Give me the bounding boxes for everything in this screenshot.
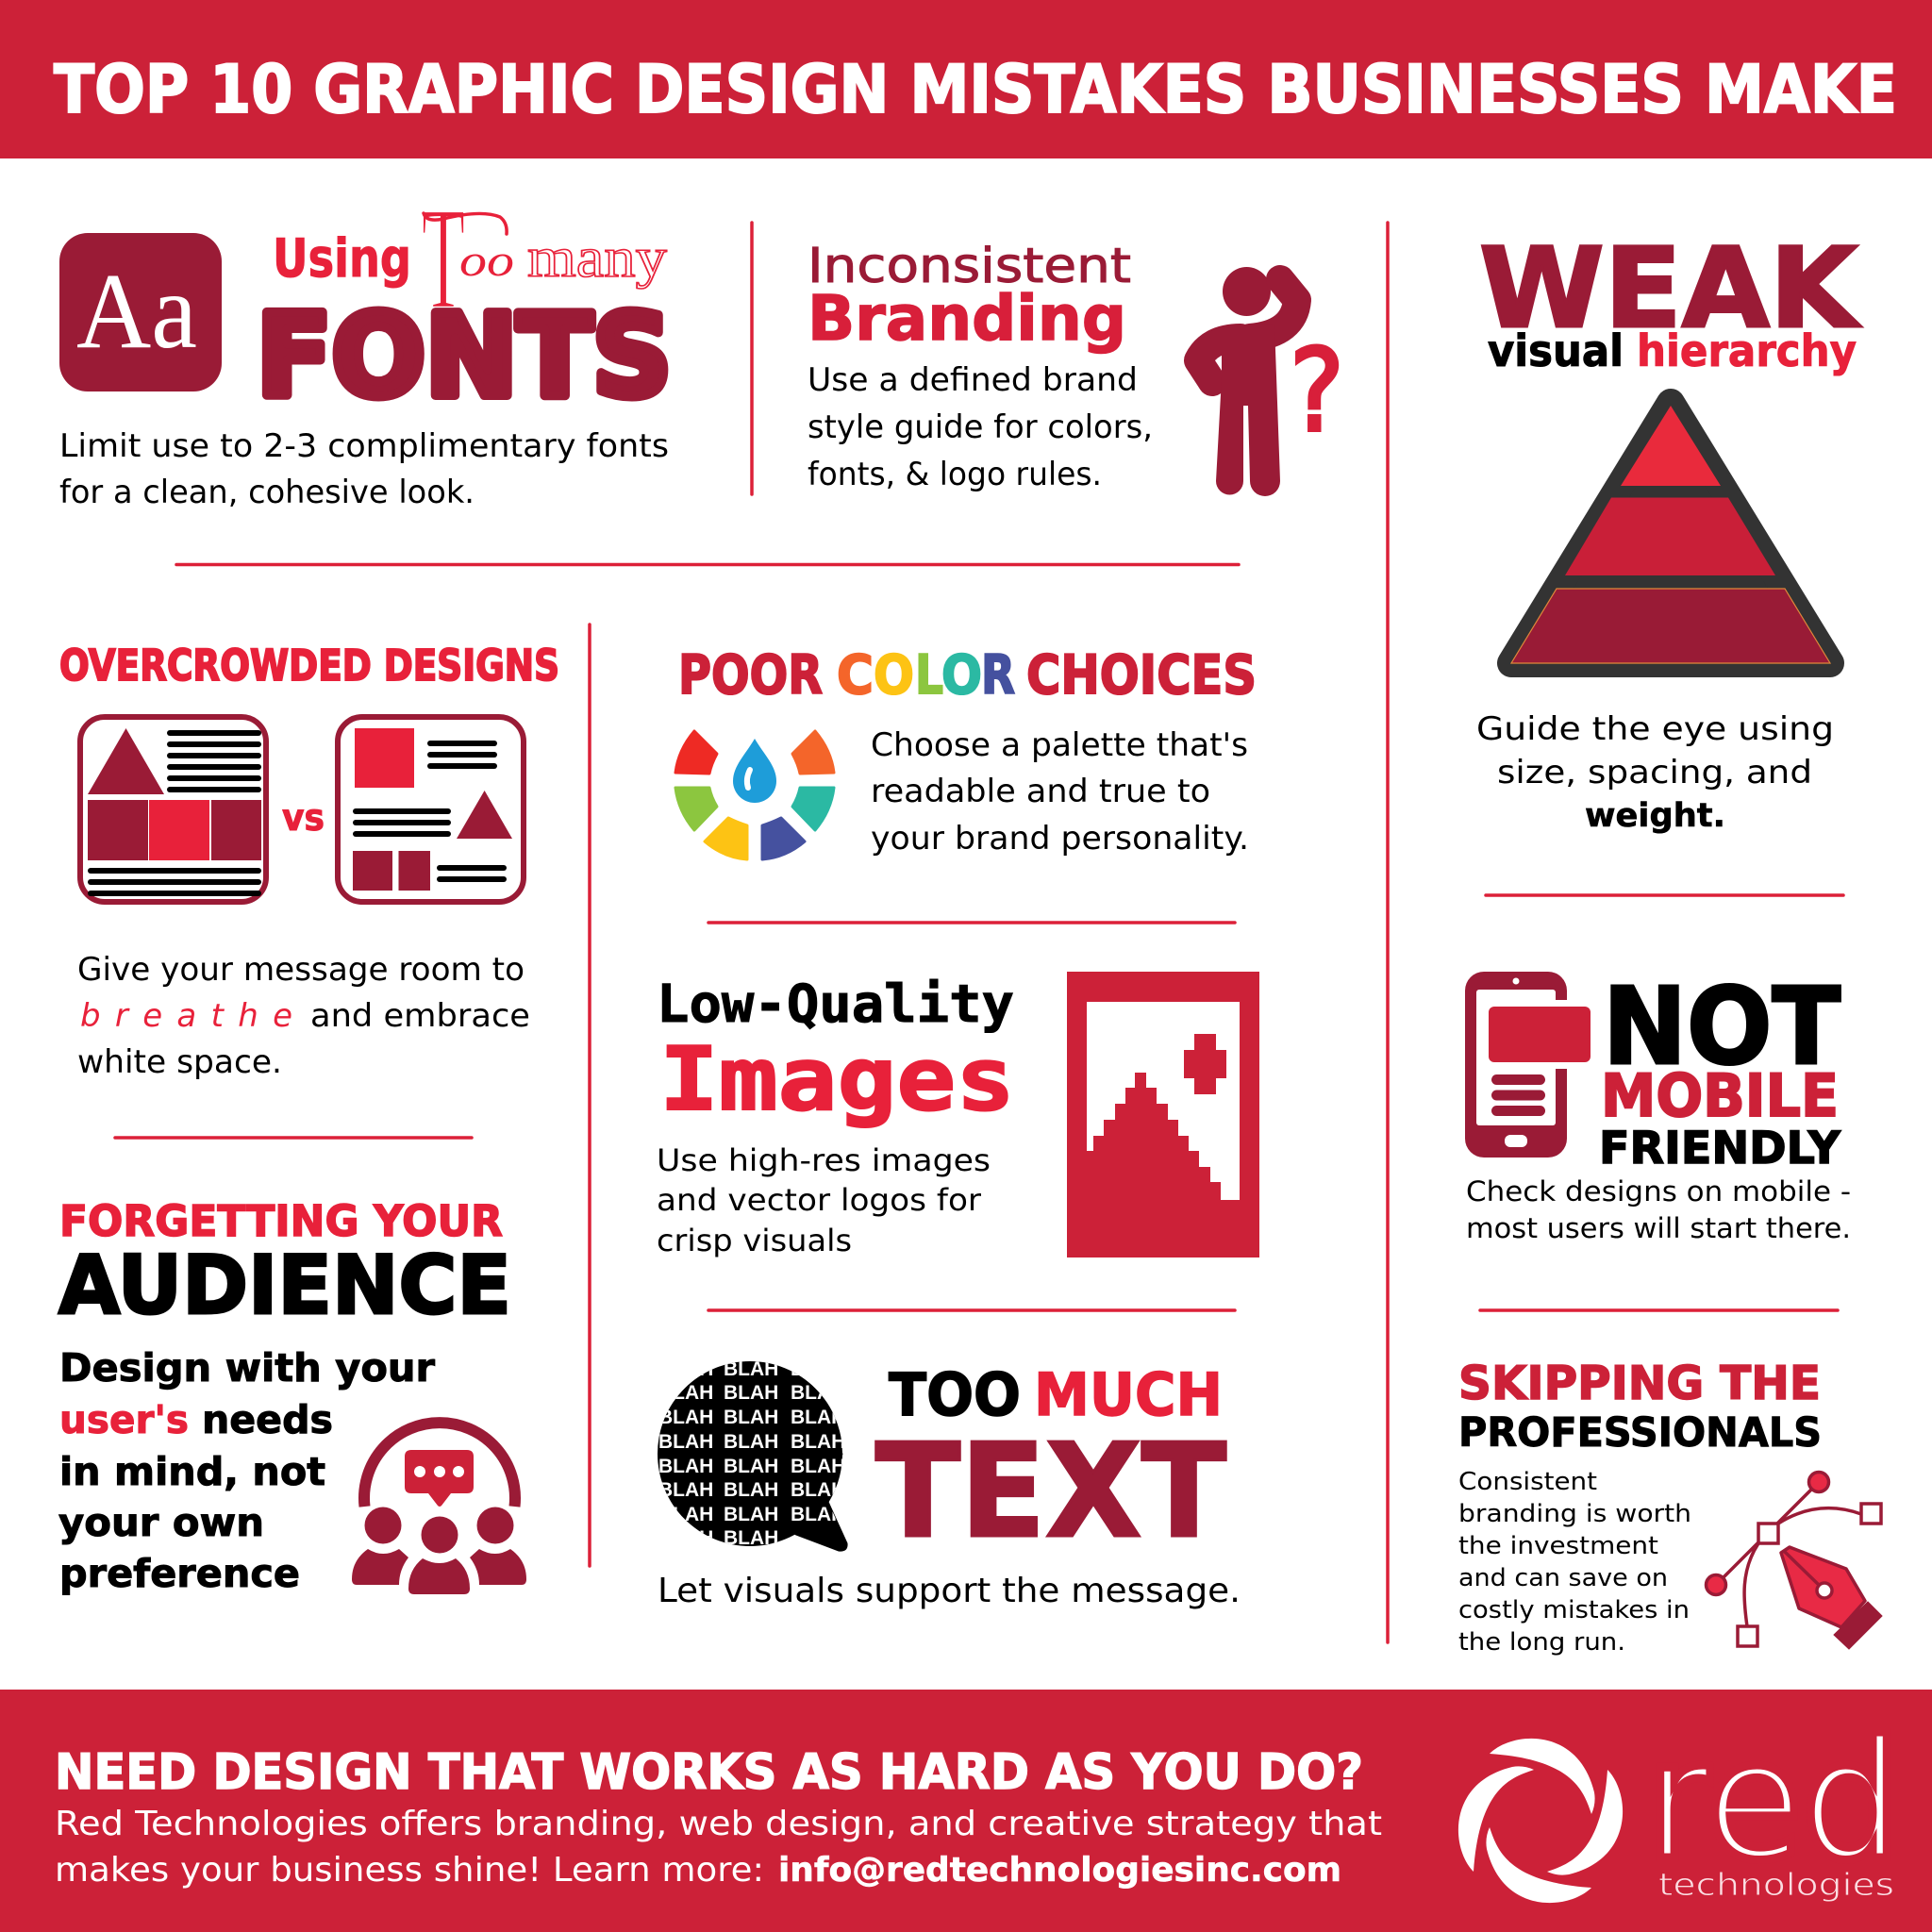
body text: fonts, & logo rules. [808, 456, 1102, 493]
body text: most users will start there. [1466, 1212, 1851, 1244]
heading: O [941, 644, 982, 707]
icon: blah speech bubble: BLAH [791, 1504, 845, 1525]
panel: skipping the professionals [1458, 1357, 1882, 1657]
icon: blah speech bubble [658, 1358, 847, 1551]
heading: images: Images [659, 1028, 1015, 1130]
heading: Branding: Branding [808, 282, 1126, 355]
panel: overcrowded designs [59, 641, 559, 1081]
body text: style guide for colors, [808, 408, 1153, 446]
heading word: Using: Using [273, 228, 411, 290]
body text: b r e a t h e [80, 997, 292, 1035]
footer text: info@redtechnologiesinc.com [778, 1851, 1341, 1890]
icon: blah speech bubble: BLAH [724, 1431, 778, 1453]
icon: phone with overflowing card [1465, 972, 1591, 1158]
icon: blah speech bubble: BLAH [724, 1479, 778, 1501]
icon: blah speech bubble: BLAH [724, 1407, 778, 1428]
heading: WEAK: WEAK [1479, 224, 1861, 353]
heading: skipping the: SKIPPING THE [1458, 1357, 1821, 1410]
body text: weight. [1585, 797, 1725, 835]
body text: Let visuals support the message. [658, 1572, 1241, 1610]
panel: using too many fonts [59, 176, 672, 511]
heading: CHOICES [1026, 644, 1257, 707]
body text [1458, 1468, 1691, 1657]
icon: blah speech bubble: BLAH [658, 1358, 713, 1380]
heading: OVERCROWDED DESIGNS [59, 641, 559, 691]
panel: not mobile friendly [1465, 966, 1851, 1244]
heading: text: TEXT [875, 1417, 1226, 1567]
panel: forgetting your audience [58, 1196, 526, 1596]
heading [678, 644, 1257, 707]
footer text: makes your business shine! Learn more: [55, 1851, 764, 1890]
heading: visual: visual [1488, 325, 1624, 376]
body text: needs [202, 1397, 333, 1442]
icon: blah speech bubble: BLAH [658, 1431, 713, 1453]
body text: in mind, not [59, 1449, 325, 1494]
body text: your own [58, 1500, 264, 1545]
body text: branding is worth [1458, 1500, 1691, 1528]
icon: swirl mark [1458, 1739, 1623, 1903]
body text: and embrace [310, 997, 530, 1035]
icon: blah speech bubble: BLAH [791, 1407, 845, 1428]
icon: audience group [352, 1423, 526, 1594]
wordmark: red: red [1646, 1706, 1901, 1897]
icon: blah speech bubble: BLAH [658, 1456, 713, 1477]
icon: blah speech bubble: BLAH [658, 1504, 713, 1525]
body text [871, 726, 1249, 858]
chart: hierarchy pyramid [1511, 403, 1830, 663]
body text: the long run. [1458, 1628, 1625, 1657]
body text: Guide the eye using [1476, 710, 1834, 748]
icon: blah speech bubble: BLAH [791, 1382, 845, 1404]
icon: blah speech bubble: BLAH [791, 1431, 845, 1453]
body text: for a clean, cohesive look. [59, 474, 475, 511]
icon: blah speech bubble: BLAH [724, 1456, 778, 1477]
panel: low-quality images [657, 972, 1259, 1258]
body text [59, 427, 669, 511]
heading: forgetting your: FORGETTING YOUR [59, 1196, 503, 1246]
body text: Give your message room to [77, 951, 525, 989]
heading: POOR [678, 644, 823, 707]
body text: your brand personality. [871, 820, 1249, 858]
body text: and vector logos for [657, 1182, 982, 1218]
icon: blah speech bubble: BLAH [791, 1479, 845, 1501]
body text: Limit use to 2-3 complimentary fonts [59, 427, 669, 465]
icon: vector pen tool [1706, 1472, 1882, 1649]
body text: costly mistakes in [1458, 1596, 1690, 1624]
icon: blah speech bubble: BLAH [724, 1527, 778, 1549]
logo: red technologies [1458, 1706, 1901, 1903]
footer text [55, 1805, 1382, 1890]
header banner [0, 0, 1932, 158]
body text: readable and true to [871, 773, 1210, 810]
icon: Aa font tile: Aa [76, 251, 197, 371]
body text: Use a defined brand [808, 361, 1138, 399]
icon: confused person [1198, 267, 1297, 496]
body text: Check designs on mobile - [1466, 1175, 1851, 1208]
panel: poor color choices [675, 644, 1257, 859]
body text: size, spacing, and [1497, 754, 1812, 791]
body text [77, 951, 530, 1081]
body text [58, 1345, 436, 1596]
heading: professionals: PROFESSIONALS [1458, 1409, 1822, 1457]
body text [808, 361, 1153, 493]
body text [1476, 710, 1834, 835]
icon: question mark: ? [1290, 326, 1344, 458]
body text [657, 1142, 991, 1258]
body text: Choose a palette that's [871, 726, 1248, 764]
wordmark: technologies: technologies [1658, 1866, 1894, 1903]
heading word: FONTS: FONTS [257, 291, 672, 423]
heading: much: MUCH [1034, 1360, 1223, 1429]
heading: low-quality: Low-Quality [657, 974, 1014, 1034]
icon: blah speech bubble: BLAH [658, 1527, 713, 1549]
icon: blah speech bubble: BLAH [724, 1504, 778, 1525]
body text: and can save on [1458, 1564, 1668, 1592]
heading: L [915, 644, 943, 707]
heading: audience: AUDIENCE [58, 1239, 511, 1333]
icon: crowded layout [80, 717, 266, 902]
body text: the investment [1458, 1532, 1658, 1560]
icon: pixelated picture [1067, 972, 1259, 1257]
icon: blah speech bubble: BLAH [724, 1382, 778, 1404]
footer text: Red Technologies offers branding, web design, and creative strategy that [55, 1805, 1382, 1843]
icon: blah speech bubble: BLAH [724, 1358, 778, 1380]
heading: mobile: MOBILE [1601, 1061, 1839, 1130]
heading word: Too: oo [459, 236, 514, 286]
body text: Consistent [1458, 1468, 1597, 1496]
icon: color wheel with drop [675, 731, 834, 859]
icon: blah speech bubble: BLAH [791, 1358, 845, 1380]
heading: O [874, 644, 914, 707]
body text: white space. [77, 1043, 282, 1081]
footer heading: NEED DESIGN THAT WORKS AS HARD AS YOU DO? [55, 1744, 1363, 1801]
icon: blah speech bubble: BLAH [658, 1382, 713, 1404]
body text: crisp visuals [657, 1223, 852, 1258]
heading: friendly: FRIENDLY [1599, 1123, 1841, 1174]
body text: Use high-res images [657, 1142, 991, 1178]
heading: too: TOO [889, 1360, 1021, 1429]
footer banner [0, 1690, 1932, 1932]
icon: blah speech bubble: BLAH [791, 1456, 845, 1477]
icon: clean layout [338, 717, 524, 902]
heading: R [981, 644, 1015, 707]
heading: hierarchy: hierarchy [1637, 325, 1857, 376]
icon: Aa font tile [59, 233, 222, 391]
heading: not: NOT [1603, 966, 1840, 1089]
heading: C [837, 644, 874, 707]
icon: blah speech bubble: BLAH [658, 1479, 713, 1501]
heading: Inconsistent: Inconsistent [808, 239, 1131, 294]
label: vs: vs [282, 797, 325, 840]
panel: inconsistent branding [808, 239, 1344, 496]
body text: Design with your [59, 1345, 436, 1391]
panel: too much text [658, 1358, 1241, 1610]
heading word: Too: T [422, 176, 465, 340]
body text [1466, 1175, 1851, 1244]
panel: weak visual hierarchy [1476, 224, 1861, 835]
icon: blah speech bubble: BLAH [658, 1407, 713, 1428]
body text: preference [59, 1551, 300, 1596]
body text: user's [59, 1397, 189, 1442]
heading word: many: many [527, 226, 667, 289]
